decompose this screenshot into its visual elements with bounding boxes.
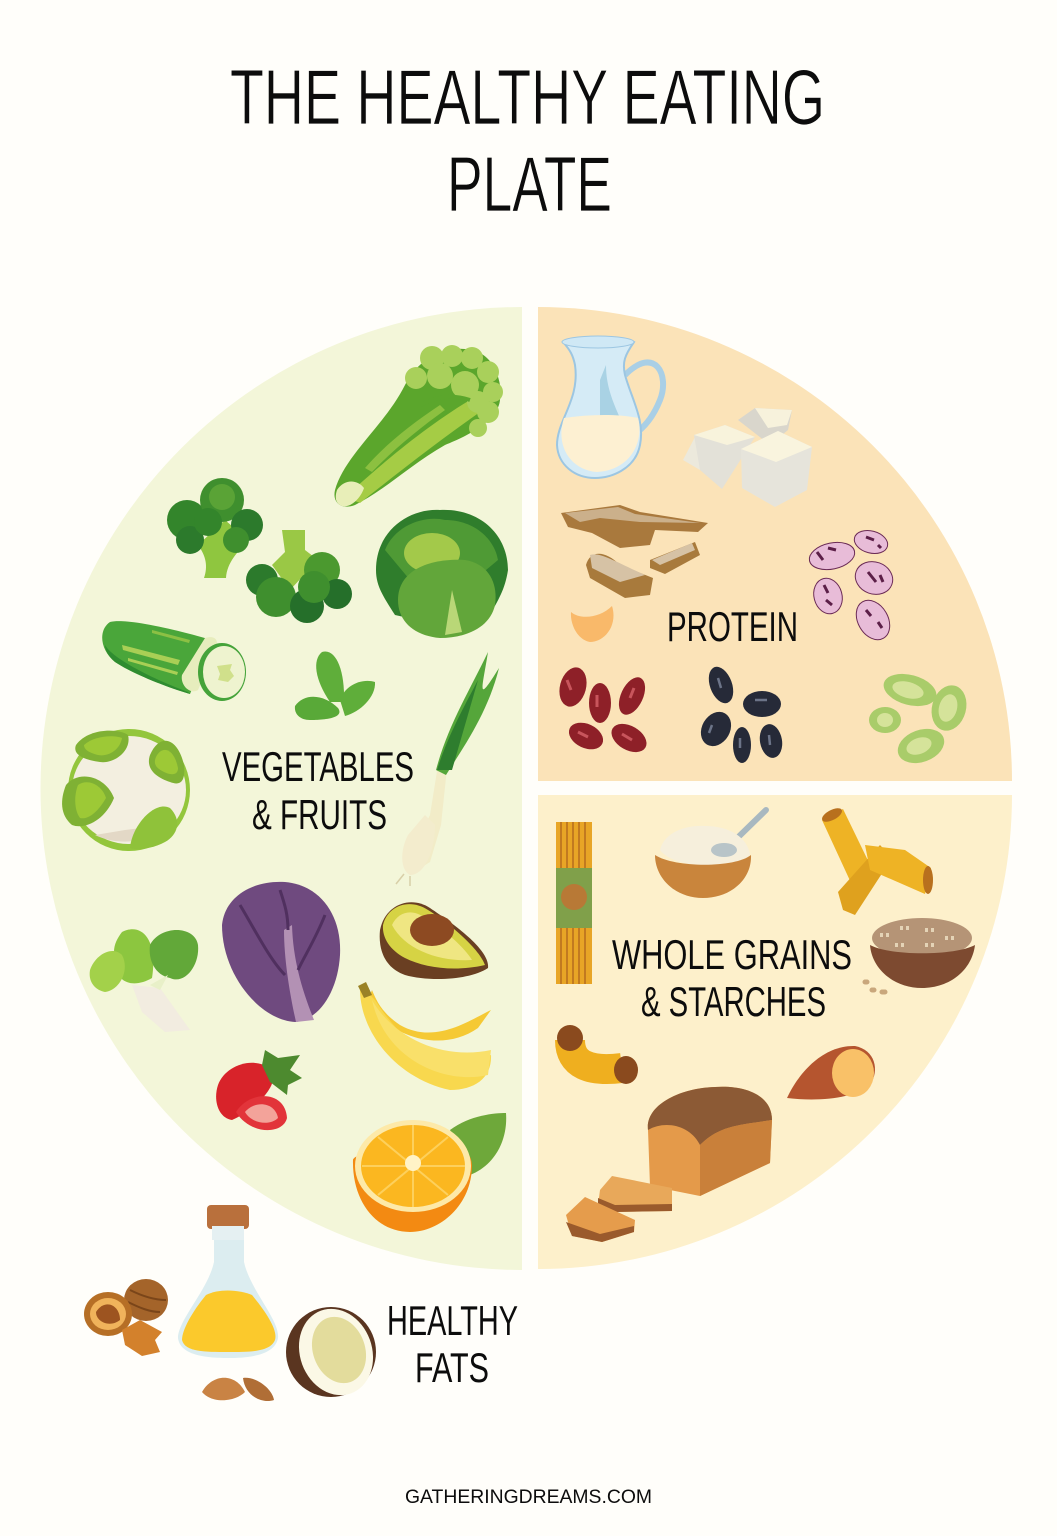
icon: orange with leaf	[353, 1113, 506, 1232]
icon: rice bowl	[655, 810, 766, 898]
icon: spinach leaves	[295, 651, 375, 720]
icon: coconut	[286, 1298, 385, 1406]
title	[230, 53, 825, 228]
icon: spring onion	[396, 652, 499, 886]
icon: pink beans	[807, 527, 897, 646]
icon: quinoa bowl	[865, 918, 975, 992]
icon: strawberries	[216, 1050, 302, 1130]
icon: broccoli	[167, 478, 263, 578]
icon: black beans	[695, 663, 785, 763]
icon: bread loaf and slices	[566, 1087, 772, 1242]
label: healthy fats	[387, 1297, 518, 1391]
footer: GATHERINGDREAMS.COM	[405, 1487, 652, 1508]
icon: pak choi	[90, 929, 198, 1032]
icon: green cabbage	[376, 510, 508, 638]
label: protein: PROTEIN	[667, 603, 798, 650]
icon: oil bottle	[178, 1205, 278, 1358]
label: vegetables and fruits: & FRUITS	[252, 791, 387, 838]
label: healthy fats: FATS	[415, 1344, 489, 1391]
icon: spaghetti pack	[556, 822, 592, 984]
icon: broccoli small	[246, 530, 352, 623]
icon: cucumber	[102, 621, 246, 701]
icon: red kidney beans	[555, 664, 651, 758]
icon: cashew	[571, 606, 613, 642]
label: whole grains and starches: & STARCHES	[641, 978, 826, 1025]
icon: celery cabbage	[334, 345, 503, 507]
icon: cauliflower	[62, 729, 190, 851]
panel: protein	[538, 307, 1012, 781]
icon: almonds	[202, 1378, 274, 1401]
icon: sweet potato	[787, 1046, 875, 1099]
icon: tofu cubes	[683, 408, 812, 507]
icon: macaroni	[557, 1025, 638, 1084]
icon: avocado	[380, 902, 488, 979]
panel: vegetables and fruits	[41, 307, 522, 1270]
label: whole grains and starches: WHOLE GRAINS	[612, 931, 852, 978]
icon: walnuts	[84, 1279, 168, 1356]
icon: bananas	[358, 982, 491, 1090]
icon: tempeh strips	[561, 505, 708, 598]
label: vegetables and fruits: VEGETABLES	[222, 743, 414, 790]
icon: milk jug	[557, 336, 663, 478]
label: vegetables and fruits	[222, 743, 414, 838]
icon: radicchio	[222, 882, 340, 1022]
icon: penne pasta	[820, 805, 933, 915]
title: THE HEALTHY EATING	[230, 53, 825, 141]
panel: whole grains and starches	[538, 795, 1012, 1269]
label: whole grains and starches	[612, 931, 852, 1025]
title: PLATE	[447, 140, 612, 228]
icon: green broad beans	[869, 669, 971, 769]
label: healthy fats: HEALTHY	[387, 1297, 518, 1344]
